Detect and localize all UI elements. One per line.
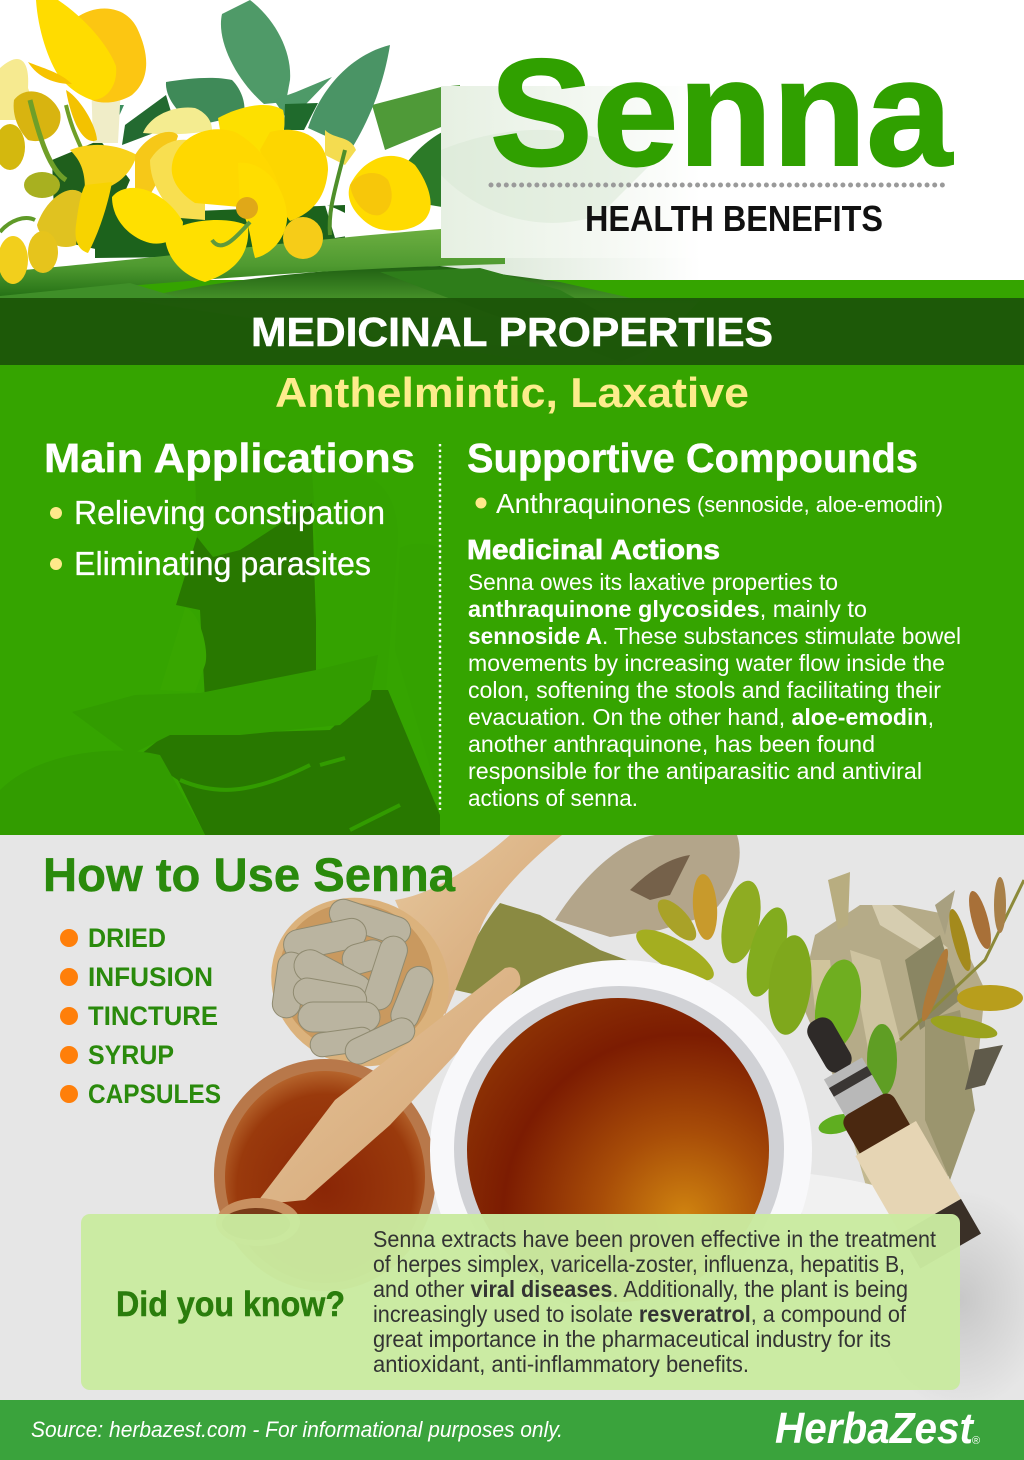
bullet: relieving constipation: Relieving constipation bbox=[74, 494, 385, 531]
panel: supportive compounds bbox=[467, 435, 961, 811]
source note: Source: herbazest.com - For informational purposes only. bbox=[31, 1417, 563, 1442]
item: dried bbox=[60, 923, 166, 953]
glass bowl of syrup bbox=[214, 1059, 435, 1214]
tea cup bbox=[430, 960, 812, 1214]
green leaves bbox=[629, 873, 1024, 1138]
list: forms of use bbox=[60, 923, 221, 1109]
title: senna: Senna bbox=[490, 28, 953, 198]
panel: title backing bbox=[441, 86, 636, 258]
text block: medicinal actions: Senna owes its laxative properties to bbox=[468, 569, 838, 595]
spoon with capsules bbox=[271, 835, 562, 1066]
footer bbox=[0, 1400, 1024, 1460]
text block: medicinal actions: colon, softening the stools and facilitating their bbox=[468, 677, 941, 703]
text block: did you know bbox=[373, 1226, 937, 1377]
illustration: woman silhouette bbox=[0, 449, 440, 835]
text block: did you know: increasingly used to isolate resveratrol, a compound of bbox=[373, 1301, 907, 1327]
text block: did you know: Senna extracts have been proven effective in the treatment bbox=[373, 1226, 937, 1252]
dropper bottle bbox=[807, 1017, 981, 1246]
text block: medicinal actions: another anthraquinone, has been found bbox=[468, 731, 875, 757]
text block: medicinal actions bbox=[468, 569, 961, 811]
saucer bbox=[802, 1174, 888, 1214]
flower: middle left bbox=[70, 107, 212, 253]
bullet: eliminating parasites: Eliminating parasites bbox=[74, 545, 371, 582]
text block: medicinal actions: evacuation. On the other hand, aloe-emodin, bbox=[468, 704, 934, 730]
heading: did you know: Did you know? bbox=[116, 1285, 345, 1324]
pale strip under title backing bbox=[441, 258, 654, 280]
heading: supportive compounds: Supportive Compounds bbox=[467, 435, 918, 481]
wooden measuring spoon bbox=[218, 967, 520, 1214]
text block: medicinal actions: movements by increasing water flow inside the bbox=[468, 650, 945, 676]
capsules bbox=[271, 896, 437, 1068]
green band above header bbox=[0, 280, 1024, 365]
text block: medicinal actions: actions of senna. bbox=[468, 785, 638, 811]
soft shadow under bottle bbox=[960, 1221, 1024, 1382]
dark band: medicinal properties header bbox=[0, 298, 1024, 365]
dried leaves bbox=[800, 872, 1003, 1200]
illustration: preparations bbox=[214, 835, 1024, 1410]
heading: anthelmintic, laxative: Anthelmintic, Laxative bbox=[275, 369, 749, 416]
bullet: anthraquinones: Anthraquinones bbox=[496, 488, 691, 519]
text block: did you know: and other viral diseases. Additionally, the plant is being bbox=[373, 1276, 908, 1302]
bullet: anthraquinones bbox=[476, 488, 943, 519]
panel: main applications bbox=[44, 435, 415, 582]
heading: medicinal properties: MEDICINAL PROPERTIES bbox=[251, 309, 773, 355]
bullet: anthraquinones: (sennoside, aloe-emodin) bbox=[697, 492, 943, 517]
heading: how to use senna: How to Use Senna bbox=[43, 848, 456, 901]
flower bud: right bbox=[349, 156, 431, 231]
flower buds: far left bbox=[0, 124, 84, 284]
subtitle: health benefits: HEALTH BENEFITS bbox=[585, 198, 883, 239]
olive pod bbox=[455, 903, 628, 996]
logo: herbazest: ® bbox=[972, 1435, 980, 1447]
hero: senna flowers and pods bbox=[0, 0, 1024, 365]
flower: center bbox=[165, 105, 356, 282]
green panel bbox=[0, 365, 1024, 835]
callout: did you know bbox=[81, 1214, 960, 1390]
item: tincture: TINCTURE bbox=[88, 1001, 218, 1031]
text block: did you know: of herpes simplex, varicella-zoster, influenza, hepatitis B, bbox=[373, 1251, 905, 1277]
text block: medicinal actions: responsible for the antiparasitic and antiviral bbox=[468, 758, 922, 784]
dried pod bbox=[555, 835, 740, 937]
faint leaf in title backing bbox=[441, 130, 650, 223]
heading: main applications: Main Applications bbox=[44, 435, 415, 481]
item: syrup: SYRUP bbox=[88, 1040, 174, 1070]
green pods bbox=[0, 229, 630, 298]
flower: upper left bbox=[0, 0, 146, 180]
item: infusion: INFUSION bbox=[88, 962, 213, 992]
text block: medicinal actions: sennoside A. These substances stimulate bowel bbox=[468, 623, 961, 649]
panel: how to use background bbox=[0, 835, 1024, 1400]
text block: medicinal actions: anthraquinone glycosides , mainly to bbox=[468, 596, 867, 622]
item: dried: DRIED bbox=[88, 923, 166, 953]
leaves and stems behind flowers bbox=[52, 0, 460, 258]
item: capsules: CAPSULES bbox=[88, 1079, 221, 1109]
heading: medicinal actions: Medicinal Actions bbox=[467, 534, 720, 565]
text block: did you know: antioxidant, anti-inflammatory benefits. bbox=[373, 1351, 749, 1377]
text block: did you know: great importance in the pharmaceutical industry for its bbox=[373, 1326, 891, 1352]
logo: herbazest: HerbaZest bbox=[775, 1404, 975, 1453]
